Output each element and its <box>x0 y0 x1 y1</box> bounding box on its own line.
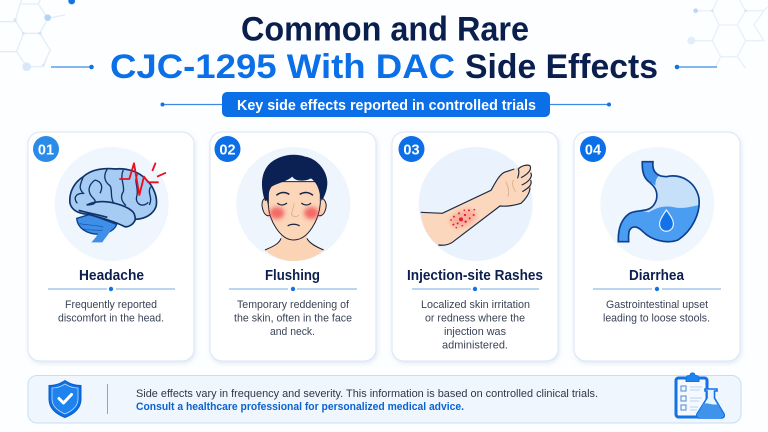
description: diarrhea: leading to loose stools. <box>603 312 710 324</box>
divider <box>106 384 108 414</box>
description: headache: discomfort in the head. <box>58 312 164 324</box>
panel: flushing <box>210 132 376 361</box>
description: injection-site rashes: or redness where the <box>425 312 525 324</box>
description: flushing <box>234 299 352 338</box>
description: diarrhea <box>603 299 710 324</box>
description: injection-site rashes: Localized skin irritation <box>421 299 530 311</box>
disclaimer text: Side effects vary in frequency and severity. This information is based on controlled clinical trials. <box>136 388 598 400</box>
icon: brain with pain spike <box>55 147 169 261</box>
description: flushing: Temporary reddening of <box>237 299 350 311</box>
badge 02: 02 <box>219 142 236 158</box>
heading: headache: Headache <box>79 268 144 284</box>
subtitle pill: Key side effects reported in controlled trials <box>237 97 536 114</box>
divider <box>412 287 539 291</box>
badge 02 <box>214 136 240 162</box>
badge 03: 03 <box>403 142 420 158</box>
icon: clipboard and flask <box>676 373 724 418</box>
description: injection-site rashes: injection was <box>444 326 506 338</box>
heading: diarrhea: Diarrhea <box>629 268 685 284</box>
decoration: molecule top-left <box>0 0 75 71</box>
title connector lines <box>51 65 717 106</box>
description: diarrhea: Gastrointestinal upset <box>606 299 708 311</box>
disclaimer text: Consult a healthcare professional for personalized medical advice. <box>136 401 464 413</box>
heading: flushing: Flushing <box>265 268 320 284</box>
description: injection-site rashes: administered. <box>442 340 508 352</box>
title: Common and Rare <box>241 10 529 48</box>
title <box>110 10 658 86</box>
panel: headache <box>28 132 194 361</box>
icon: stomach with droplet <box>600 147 714 261</box>
title: Side Effects <box>465 48 658 86</box>
icon: shield with check <box>49 380 81 418</box>
divider <box>48 287 175 291</box>
badge 03 <box>398 136 424 162</box>
subtitle pill <box>222 92 550 117</box>
decoration: molecule top-right <box>687 0 768 68</box>
description: flushing: and neck. <box>270 326 315 338</box>
badge 01 <box>33 136 59 162</box>
description: flushing: the skin, often in the face <box>234 312 352 324</box>
badge 04 <box>580 136 606 162</box>
heading: injection-site rashes: Injection-site Rashes <box>407 268 543 284</box>
description: headache: Frequently reported <box>65 299 157 311</box>
description: injection-site rashes <box>421 299 530 352</box>
panel: disclaimer banner <box>28 373 741 423</box>
icon: arm with rash <box>419 147 533 261</box>
divider <box>593 287 721 291</box>
title: CJC-1295 With DAC <box>110 48 455 86</box>
description: headache <box>58 299 164 324</box>
panel: diarrhea <box>574 132 740 361</box>
panel: injection-site rashes <box>392 132 558 361</box>
badge 04: 04 <box>585 142 601 158</box>
divider <box>229 287 357 291</box>
badge 01: 01 <box>38 142 54 158</box>
icon: flushed face <box>236 147 350 262</box>
disclaimer text <box>136 388 598 413</box>
